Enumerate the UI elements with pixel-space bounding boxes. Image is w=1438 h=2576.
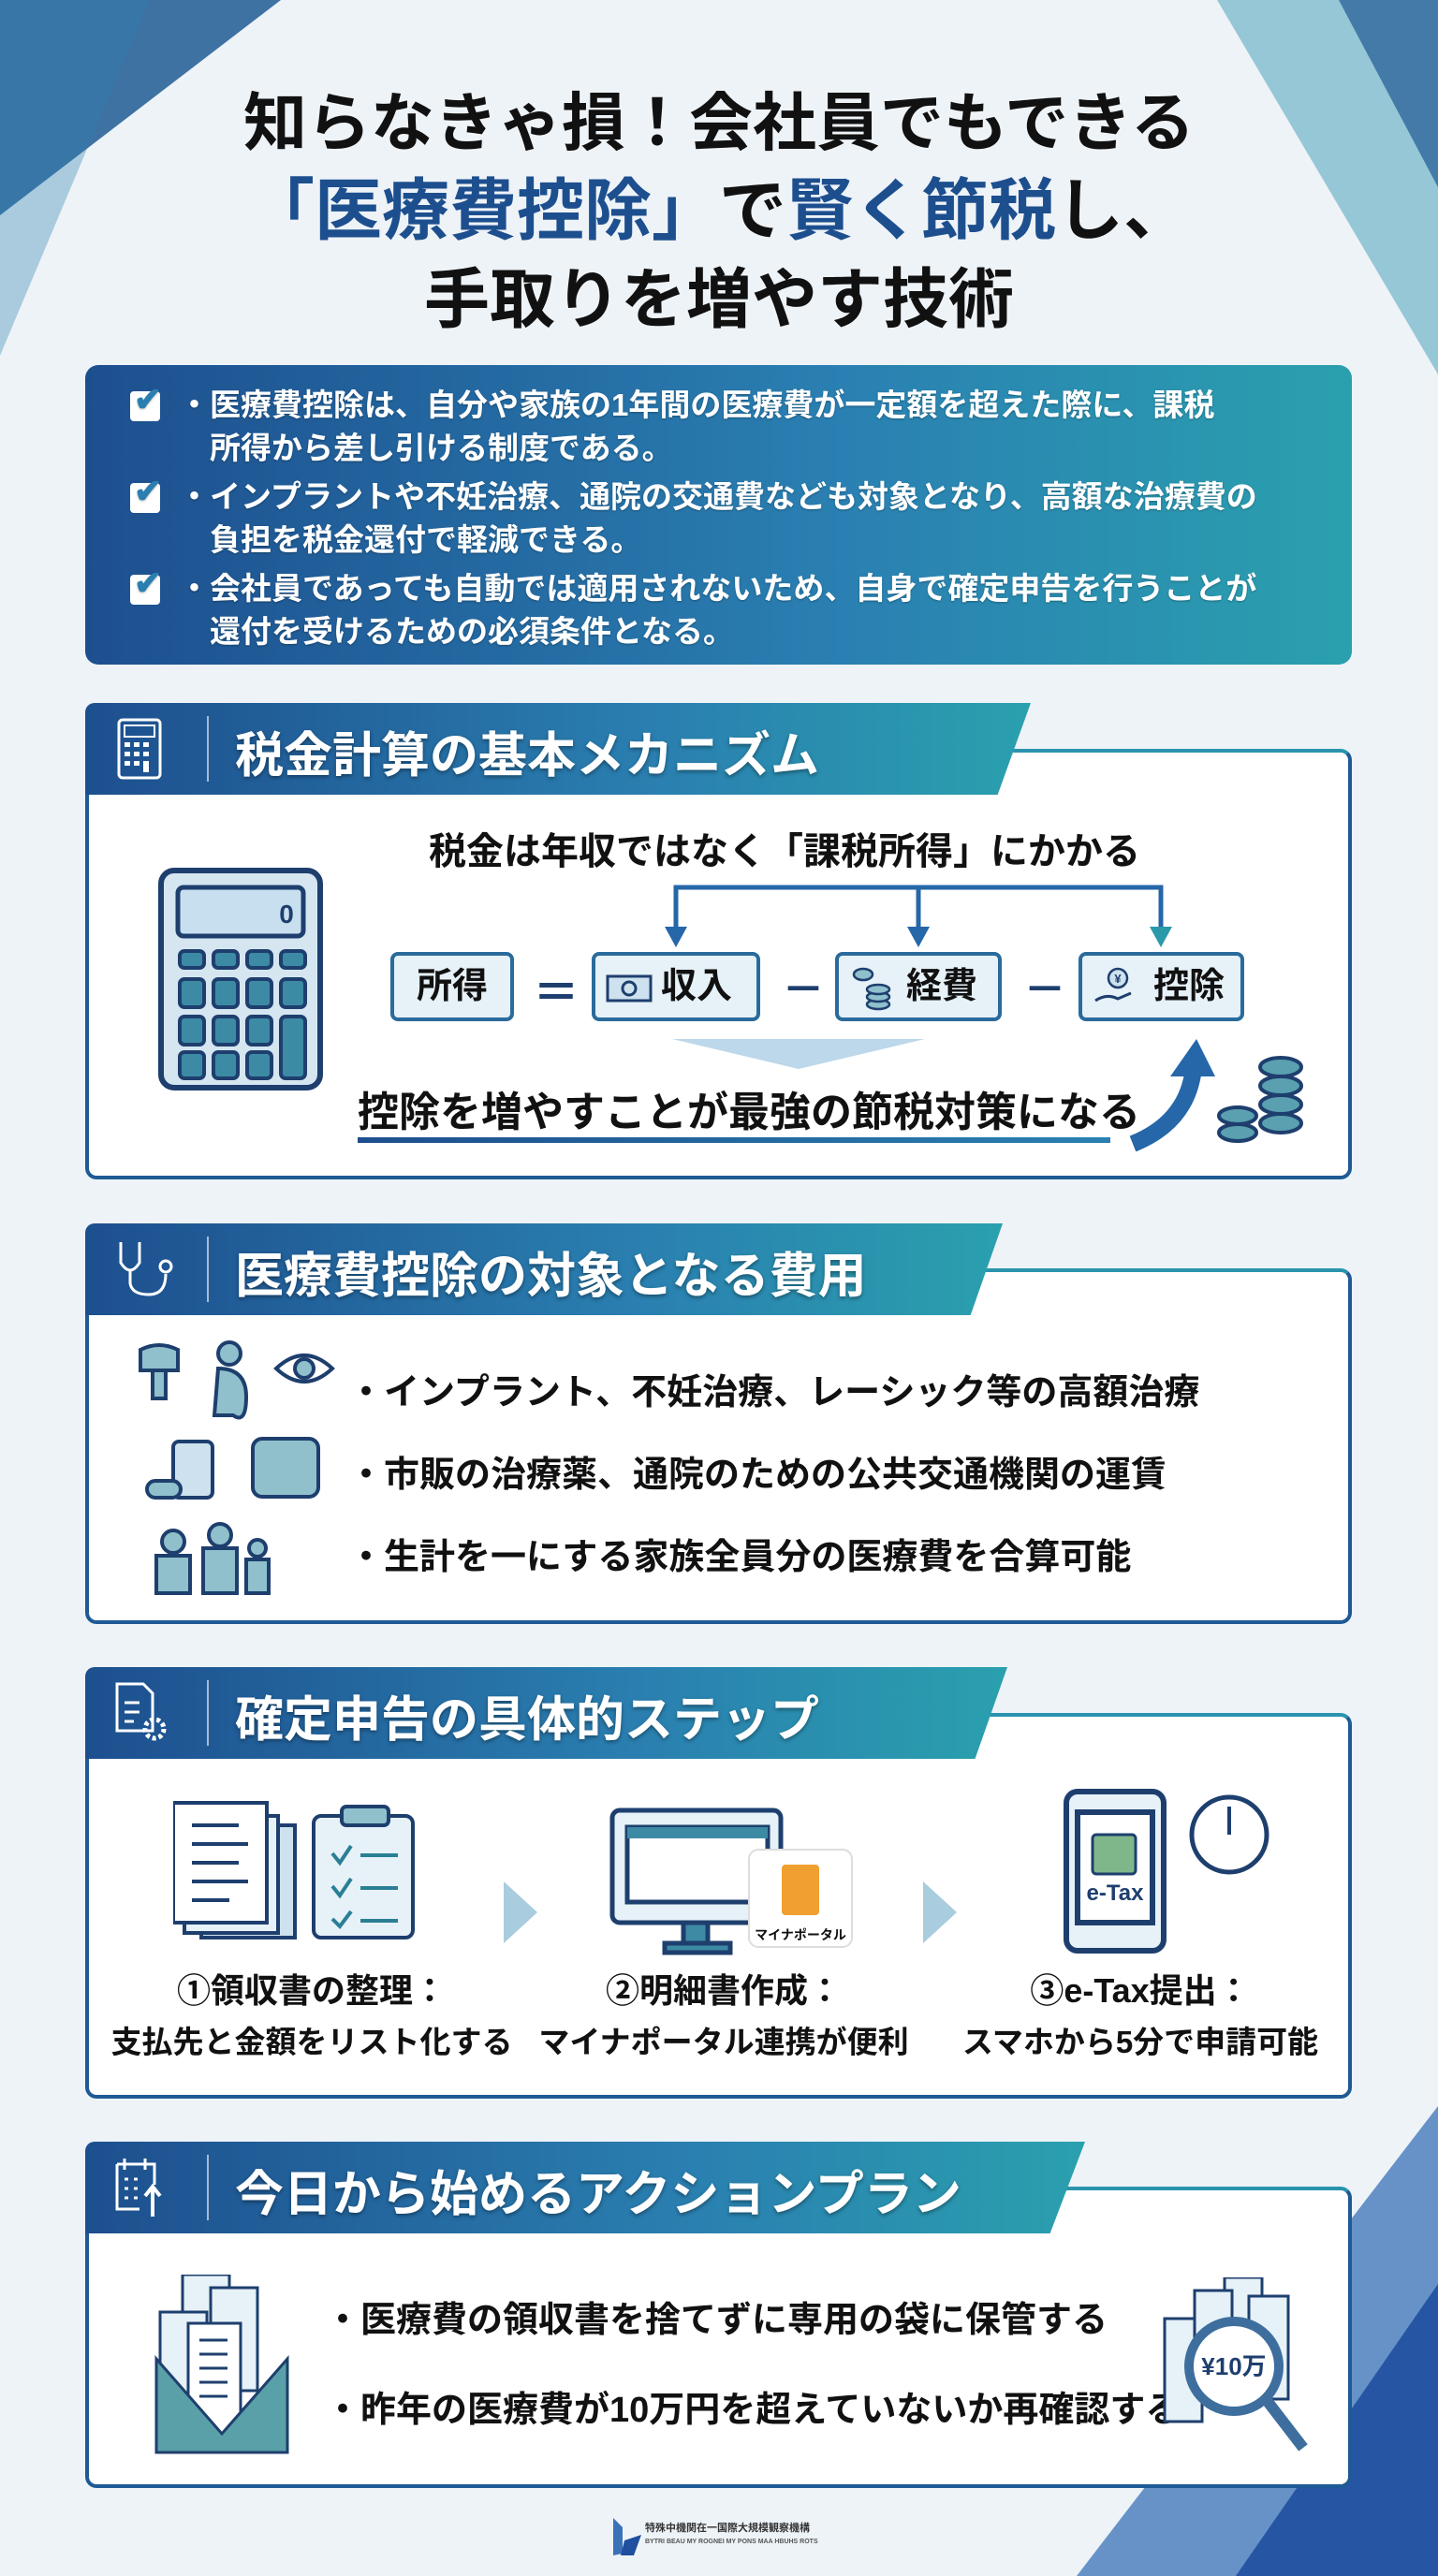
text: マイナポータル連携が便利 xyxy=(538,2025,909,2059)
summary box: 還付を受けるための必須条件となる。 xyxy=(210,614,734,649)
summary box: ✔ xyxy=(134,472,162,510)
footer logo xyxy=(613,2518,818,2555)
summary box: ✔ xyxy=(134,564,162,602)
action list xyxy=(325,2301,1181,2430)
panel: tax mechanism xyxy=(85,749,1352,1179)
title: 手取りを増やす技術 xyxy=(424,263,1014,336)
title: 「医療費控除」で賢く節税し、 xyxy=(247,174,1191,249)
underline xyxy=(358,1137,1110,1143)
summary box: 所得から差し引ける制度である。 xyxy=(210,431,673,465)
text: ③e-Tax提出： xyxy=(1030,1971,1251,2010)
icon: calculator: 0 xyxy=(279,900,294,929)
step labels xyxy=(110,1971,1318,2059)
action list: ・昨年の医療費が10万円を超えていないか再確認する xyxy=(325,2391,1181,2430)
footer logo: BYTRI BEAU MY ROGNEI MY PONS MAA HBUHS ROTS xyxy=(645,2539,818,2545)
header: action plan xyxy=(85,2142,1085,2233)
icons: medical xyxy=(139,1340,335,1595)
formula: 経費 xyxy=(906,967,977,1006)
summary box: ✔ xyxy=(134,380,162,418)
icon: up arrow and coins xyxy=(1129,1039,1303,1151)
header: tax mechanism: 税金計算の基本メカニズム xyxy=(235,729,819,783)
subtitle: taxable income: 税金は年収ではなく「課税所得」にかかる xyxy=(429,831,1140,872)
icon: magnifier 10万 xyxy=(1163,2277,1308,2452)
step 2 icon: マイナポータル xyxy=(755,1927,846,1942)
step 3 icon: e-Tax xyxy=(1087,1881,1144,1906)
expense list: ・インプラント、不妊治療、レーシック等の高額治療 xyxy=(348,1373,1199,1412)
text: スマホから5分で申請可能 xyxy=(962,2025,1318,2059)
icon: calculator xyxy=(158,868,323,1090)
header: action plan: 今日から始めるアクションプラン xyxy=(235,2168,961,2222)
chevron 2 xyxy=(923,1881,957,1943)
title xyxy=(243,88,1195,336)
summary box: ・会社員であっても自動では適用されないため、自身で確定申告を行うことが xyxy=(179,571,1256,606)
formula: 控除 xyxy=(1153,967,1225,1006)
icon: envelope receipts xyxy=(155,2275,288,2454)
footer logo: 特殊中機関在一国際大規模観察機構 xyxy=(645,2523,810,2534)
key message: 控除を増やすことが最強の節税対策になる xyxy=(358,1090,1140,1135)
title: 知らなきゃ損！会社員でもできる xyxy=(243,88,1195,159)
panel: filing steps xyxy=(85,1713,1352,2099)
chevron 1 xyxy=(504,1881,537,1943)
formula: － xyxy=(1023,965,1066,1014)
summary box: 負担を税金還付で軽減できる。 xyxy=(210,522,641,557)
text: 支払先と金額をリスト化する xyxy=(110,2025,513,2059)
formula: 収入 xyxy=(661,967,732,1006)
icon: magnifier 10万: ¥10万 xyxy=(1201,2352,1267,2380)
summary box xyxy=(85,365,1352,665)
arrows: distribution xyxy=(665,886,1172,947)
summary box: ・インプラントや不妊治療、通院の交通費なども対象となり、高額な治療費の xyxy=(179,479,1257,514)
header: filing steps xyxy=(85,1667,1007,1759)
step 1 icon xyxy=(173,1801,415,1939)
header: eligible expenses: 医療費控除の対象となる費用 xyxy=(235,1250,866,1304)
step 3 icon xyxy=(1064,1789,1269,1954)
expense list: ・生計を一にする家族全員分の医療費を合算可能 xyxy=(348,1538,1131,1577)
action list: ・医療費の領収書を捨てずに専用の袋に保管する xyxy=(325,2301,1108,2340)
expense list xyxy=(348,1373,1199,1577)
panel: eligible expenses xyxy=(85,1268,1352,1624)
formula xyxy=(390,952,1244,1021)
text: ①領収書の整理： xyxy=(177,1971,447,2010)
summary box: ・医療費控除は、自分や家族の1年間の医療費が一定額を超えた際に、課税 xyxy=(179,388,1214,422)
formula: 所得 xyxy=(417,967,488,1006)
header: filing steps: 確定申告の具体的ステップ xyxy=(235,1693,819,1748)
expense list: ・市販の治療薬、通院のための公共交通機関の運賃 xyxy=(348,1456,1167,1495)
header: eligible expenses xyxy=(85,1223,1003,1315)
formula: ＝ xyxy=(533,967,580,1019)
text: ②明細書作成： xyxy=(606,1971,842,2010)
down triangle xyxy=(672,1039,925,1069)
header: tax mechanism xyxy=(85,703,1031,795)
formula: ¥ xyxy=(1114,972,1122,986)
step 2 icon xyxy=(610,1808,853,1954)
panel: action plan xyxy=(85,2187,1352,2488)
formula: － xyxy=(782,965,825,1014)
